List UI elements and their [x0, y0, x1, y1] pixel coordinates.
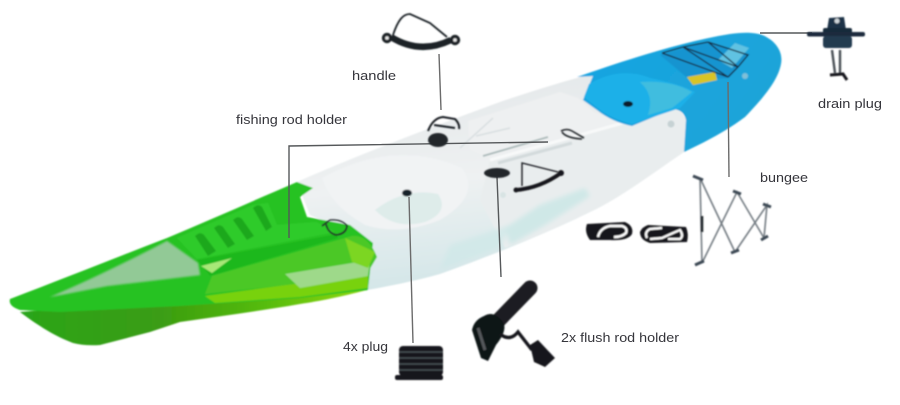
label: 2x flush rod holder: 2x flush rod holder — [561, 331, 679, 345]
leader line: 4x plug — [409, 197, 413, 343]
icon: bungee clips — [586, 222, 688, 243]
label: bungee: bungee — [760, 171, 808, 185]
seat well — [322, 155, 468, 229]
fishing rod holder fitting — [428, 133, 448, 147]
deck plug oval left — [402, 190, 412, 196]
icon: drain plug — [807, 17, 865, 80]
label: fishing rod holder: fishing rod holder — [236, 113, 347, 127]
deck handle green section — [322, 220, 347, 235]
kayak — [10, 33, 781, 345]
deck fittings — [322, 117, 584, 235]
deck handle center — [561, 130, 584, 139]
kayak green top — [10, 182, 373, 312]
flush rod holder fitting — [484, 168, 510, 178]
kayak blue bow section — [577, 33, 781, 152]
leader line: handle — [439, 54, 441, 110]
icon: handle — [384, 14, 458, 47]
cockpit floor — [468, 92, 622, 158]
leader line: bungee — [728, 82, 729, 177]
deck handle lower — [516, 173, 561, 190]
green pontoon — [205, 236, 377, 294]
icon: bungee cord — [693, 176, 771, 265]
seat back — [177, 203, 335, 259]
deck handle top — [428, 117, 459, 131]
small pad eyes — [668, 120, 674, 128]
white pontoon right — [480, 109, 686, 248]
left clip — [586, 222, 632, 240]
leader line: flush rod holder — [497, 177, 501, 277]
label: 4x plug: 4x plug — [343, 340, 388, 354]
label: drain plug: drain plug — [818, 97, 882, 111]
green lower band fade — [205, 268, 368, 303]
deck bungee lines — [662, 42, 748, 77]
gray-green nose deck — [50, 241, 200, 297]
blue scoop highlight — [584, 73, 695, 124]
leader line: drain plug — [760, 32, 812, 34]
icon: flush rod holder — [472, 288, 555, 367]
label: handle: handle — [352, 69, 396, 83]
scoop drain hole — [623, 101, 633, 107]
deck hatch area — [660, 42, 750, 80]
kayak lower hull — [20, 282, 367, 345]
icon: 4x plug — [395, 346, 443, 380]
teal splash — [440, 188, 590, 270]
kayak white mid section — [297, 72, 690, 290]
yellow deck label — [687, 72, 717, 85]
right clip — [640, 225, 688, 243]
foot rail — [197, 234, 338, 276]
leader line: fishing rod holder — [289, 142, 548, 238]
